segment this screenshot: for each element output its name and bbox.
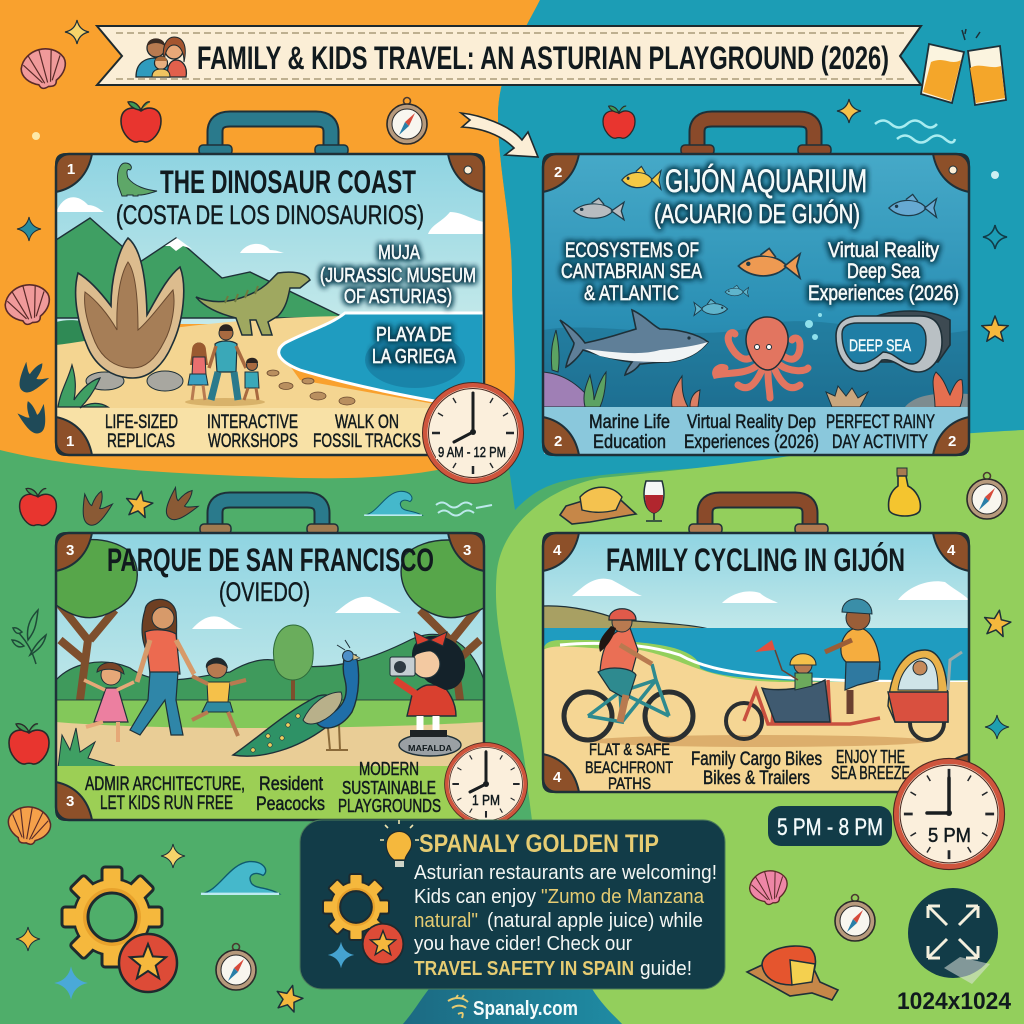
icon: compass [967, 472, 1007, 519]
clouds [56, 197, 484, 253]
corners: 1 [66, 433, 74, 450]
dinosaur [196, 272, 310, 335]
icon: star [982, 316, 1008, 341]
text: playa de la griega: LA GRIEGA [372, 346, 457, 368]
icon: apple [9, 724, 49, 764]
text: card 1 features: WORKSHOPS [208, 431, 298, 452]
feature band: ADMIR ARCHITECTURE, [85, 774, 245, 795]
icon: blue fish [889, 194, 936, 217]
text: playa de la griega [372, 324, 457, 368]
icon: wave [201, 862, 279, 894]
sky [543, 533, 969, 633]
icon: wave [364, 491, 422, 515]
text: muja: OF ASTURIAS) [344, 286, 452, 308]
tip body text: natural" [414, 910, 478, 932]
corners [56, 154, 484, 455]
icon: teal sparkle [17, 217, 41, 241]
icon: teal sparkle [985, 715, 1009, 739]
clock: 5 pm: 5 PM [928, 825, 971, 847]
icon: family [136, 37, 186, 77]
icon: brown footprint [75, 486, 115, 530]
icon: brown footprint 2 [158, 481, 203, 527]
text: card 4 features: Bikes & Trailers [703, 768, 810, 789]
icon: shell [17, 44, 70, 93]
icon: light bulb [380, 820, 419, 867]
feature band: PERFECT RAINY [826, 412, 935, 433]
text: card 4 features: ENJOY THE [836, 747, 905, 767]
tip heading: SPANALY GOLDEN TIP [419, 830, 659, 858]
icon: sparkle [65, 20, 89, 44]
tip body text [414, 862, 717, 980]
corners: 4 [947, 542, 956, 559]
icon: oil bottle [889, 468, 920, 516]
peacock [233, 640, 360, 756]
feature band: Education [593, 432, 666, 453]
heading: parque de san francisco [107, 542, 434, 607]
sand [57, 316, 432, 408]
feature band [57, 759, 483, 819]
clock: 9 am - 12 pm: 9 AM - 12 PM [438, 444, 506, 461]
icon: shell 2 [1, 280, 54, 329]
father cargo bike [726, 599, 944, 740]
plant [58, 365, 108, 408]
text: virtual reality: Virtual Reality [828, 239, 939, 262]
time pill: 5 pm - 8 pm [768, 806, 892, 846]
feature band: MODERN [359, 759, 419, 779]
heading: the dinosaur coast [116, 164, 424, 230]
corners: 3 [66, 793, 74, 810]
corners: 2 [554, 433, 562, 450]
corners [56, 533, 484, 820]
text: ecosystems: ECOSYSTEMS OF [565, 239, 699, 262]
clock: 1 pm: 1 PM [472, 792, 500, 809]
bubbles [805, 313, 822, 340]
time pill: 5 pm - 8 pm: 5 PM - 8 PM [777, 814, 883, 841]
icon: cheese board [560, 487, 636, 524]
fossil tracks [267, 370, 355, 405]
icon: compass [387, 98, 427, 144]
feature band [544, 407, 968, 454]
heading: gijon aquarium: GIJÓN AQUARIUM [665, 163, 867, 199]
icon: grey fish [574, 198, 624, 220]
sand [543, 646, 969, 792]
dino icon [117, 163, 157, 196]
sky [57, 534, 483, 679]
shark [560, 310, 708, 375]
tip body text: you have cider! Check our [414, 933, 632, 955]
icon: gear with star [323, 874, 403, 968]
icon: outline sparkle [983, 225, 1007, 249]
mafalda statue [390, 632, 465, 756]
text: card 4 features: Family Cargo Bikes [691, 749, 822, 770]
feature band: Peacocks [256, 794, 325, 815]
mafalda statue: MAFALDA [408, 743, 452, 753]
panel: card 1 dinosaur coast [56, 119, 484, 455]
octopus [716, 317, 808, 398]
seabed [543, 330, 969, 407]
feature band: Virtual Reality Dep [687, 412, 816, 433]
heading: parque de san francisco: PARQUE DE SAN FRANCISCO [107, 542, 434, 578]
icon: star [273, 982, 305, 1013]
feature band: Marine Life [589, 412, 670, 433]
icon: logo mark [448, 995, 468, 1018]
grass [57, 700, 483, 728]
icon: star [982, 608, 1013, 637]
text: card 1 features: FOSSIL TRACKS [313, 431, 421, 452]
text: ecosystems [561, 239, 702, 305]
feature band: Experiences (2026) [684, 432, 819, 453]
plant [58, 728, 115, 768]
icon: clinking glasses [921, 29, 1006, 105]
decorative icons: top left [1, 20, 427, 438]
text: muja: MUJA [378, 242, 421, 264]
feature band: PLAYGROUNDS [338, 796, 441, 816]
icon: water waves [875, 120, 955, 142]
website text: Spanaly.com [473, 998, 578, 1020]
text: card 1 features: REPLICAS [107, 431, 175, 452]
corners: 4 [553, 769, 562, 786]
icon: leaf sprig [12, 610, 46, 664]
size label: 1024x1024 [897, 988, 1012, 1015]
corners: 2 [554, 164, 562, 181]
tip body text: Kids can enjoy [414, 886, 536, 908]
fish silhouettes [725, 285, 749, 297]
mountains [56, 218, 345, 318]
icon: apple [20, 488, 56, 526]
path [56, 722, 484, 770]
text: card 1 features: INTERACTIVE [207, 412, 298, 433]
icon: yellow fish [622, 166, 661, 189]
spanaly logo [448, 995, 578, 1020]
large gear with star badge [62, 867, 177, 992]
text: ecosystems: CANTABRIAN SEA [561, 260, 702, 283]
text: card 1 features: LIFE-SIZED [105, 412, 178, 433]
icon: orange fish [738, 248, 800, 278]
text: deep sea on goggles: DEEP SEA [849, 336, 911, 355]
icon: dark footprint [11, 355, 54, 399]
title banner [97, 26, 921, 85]
handle [689, 500, 828, 534]
tip body text: "Zumo de Manzana [541, 886, 705, 908]
feature band: SUSTAINABLE [342, 778, 436, 798]
corners [543, 154, 969, 455]
tip body text: (natural apple juice) while [487, 910, 703, 932]
mother on bike [564, 609, 693, 740]
text: muja [320, 242, 476, 308]
sea [543, 628, 969, 682]
handle [681, 119, 831, 155]
handle [200, 500, 338, 534]
icon: sparkle [16, 927, 40, 951]
icon: pink shell [746, 867, 792, 908]
feature band: LET KIDS RUN FREE [100, 793, 233, 814]
icon: star [124, 489, 155, 518]
icon: cheese board [747, 946, 838, 1000]
icon: dark footprint 2 [15, 396, 53, 438]
icon: wine glass [644, 481, 664, 521]
clouds [572, 579, 969, 603]
corners: 3 [66, 542, 74, 559]
text: card 4 features [585, 740, 910, 793]
text: playa de la griega: PLAYA DE [376, 324, 452, 346]
corners: 1 [67, 161, 75, 178]
handle [199, 119, 348, 155]
corners: 4 [553, 542, 562, 559]
text: card 4 features: FLAT & SAFE [589, 740, 670, 759]
VR headset [836, 311, 950, 372]
tip body text: Asturian restaurants are welcoming! [414, 862, 717, 884]
headland [543, 606, 712, 630]
giant dinosaur footprint [76, 238, 184, 391]
corners [543, 533, 969, 792]
trees [50, 540, 490, 700]
corners: 3 [463, 542, 471, 559]
icon: sparkle [161, 844, 185, 868]
expand icon [908, 888, 998, 984]
icon: small waves [436, 502, 492, 516]
family [185, 324, 265, 406]
text: card 4 features: BEACHFRONT [585, 758, 673, 777]
text: card 4 features: SEA BREEZE [831, 763, 910, 783]
heading: the dinosaur coast: THE DINOSAUR COAST [160, 164, 416, 200]
panel: card 3 parque de san francisco [50, 500, 490, 820]
feature band: Resident [259, 774, 324, 795]
text: card 1 features: WALK ON [335, 412, 399, 433]
arrow: between cards 1 and 2 [461, 113, 538, 157]
panel: golden tip [300, 820, 725, 989]
family [84, 599, 246, 742]
sky [56, 154, 484, 324]
icon: dot [32, 132, 40, 140]
heading: gijon aquarium [654, 163, 867, 229]
heading: parque de san francisco: (OVIEDO) [219, 577, 310, 607]
icon: dot [991, 171, 999, 179]
icon: orange shell [5, 804, 53, 847]
icon: sparkle [837, 99, 861, 123]
trailer [888, 650, 962, 722]
icon: compass [216, 944, 256, 990]
text: card 4 features: PATHS [608, 774, 651, 793]
text: virtual reality: Deep Sea [847, 260, 920, 283]
heading: gijon aquarium: (ACUARIO DE GIJÓN) [654, 198, 860, 229]
decorative icons: middle band [5, 468, 1013, 1013]
text: muja: (JURASSIC MUSEUM [320, 265, 476, 287]
panel: card 2 gijon aquarium [543, 119, 969, 455]
tip body text: TRAVEL SAFETY IN SPAIN [414, 958, 634, 980]
icon: compass [835, 894, 875, 941]
tip body text: guide! [640, 958, 692, 980]
heading: family cycling: FAMILY CYCLING IN GIJÓN [606, 542, 905, 578]
icon: blue sparkle [54, 966, 88, 1000]
text: virtual reality [808, 239, 959, 305]
icon: apple [121, 102, 161, 142]
clock: 5 pm [893, 758, 1005, 870]
heading: the dinosaur coast: (COSTA DE LOS DINOSAURIOS) [116, 200, 424, 230]
clock: 9 am - 12 pm [422, 382, 524, 484]
text: virtual reality: Experiences (2026) [808, 282, 959, 305]
corners: 2 [948, 433, 956, 450]
panel: card 4 family cycling [543, 500, 969, 793]
background bushes [57, 634, 483, 700]
icon: apple [603, 106, 635, 138]
text: card 1 features [105, 412, 421, 452]
sea [279, 313, 484, 402]
decorative icons: top right [603, 29, 1008, 341]
clock: 1 pm [445, 743, 527, 825]
clouds [192, 597, 401, 629]
text: ecosystems: & ATLANTIC [584, 282, 679, 305]
feature band: DAY ACTIVITY [832, 432, 928, 453]
